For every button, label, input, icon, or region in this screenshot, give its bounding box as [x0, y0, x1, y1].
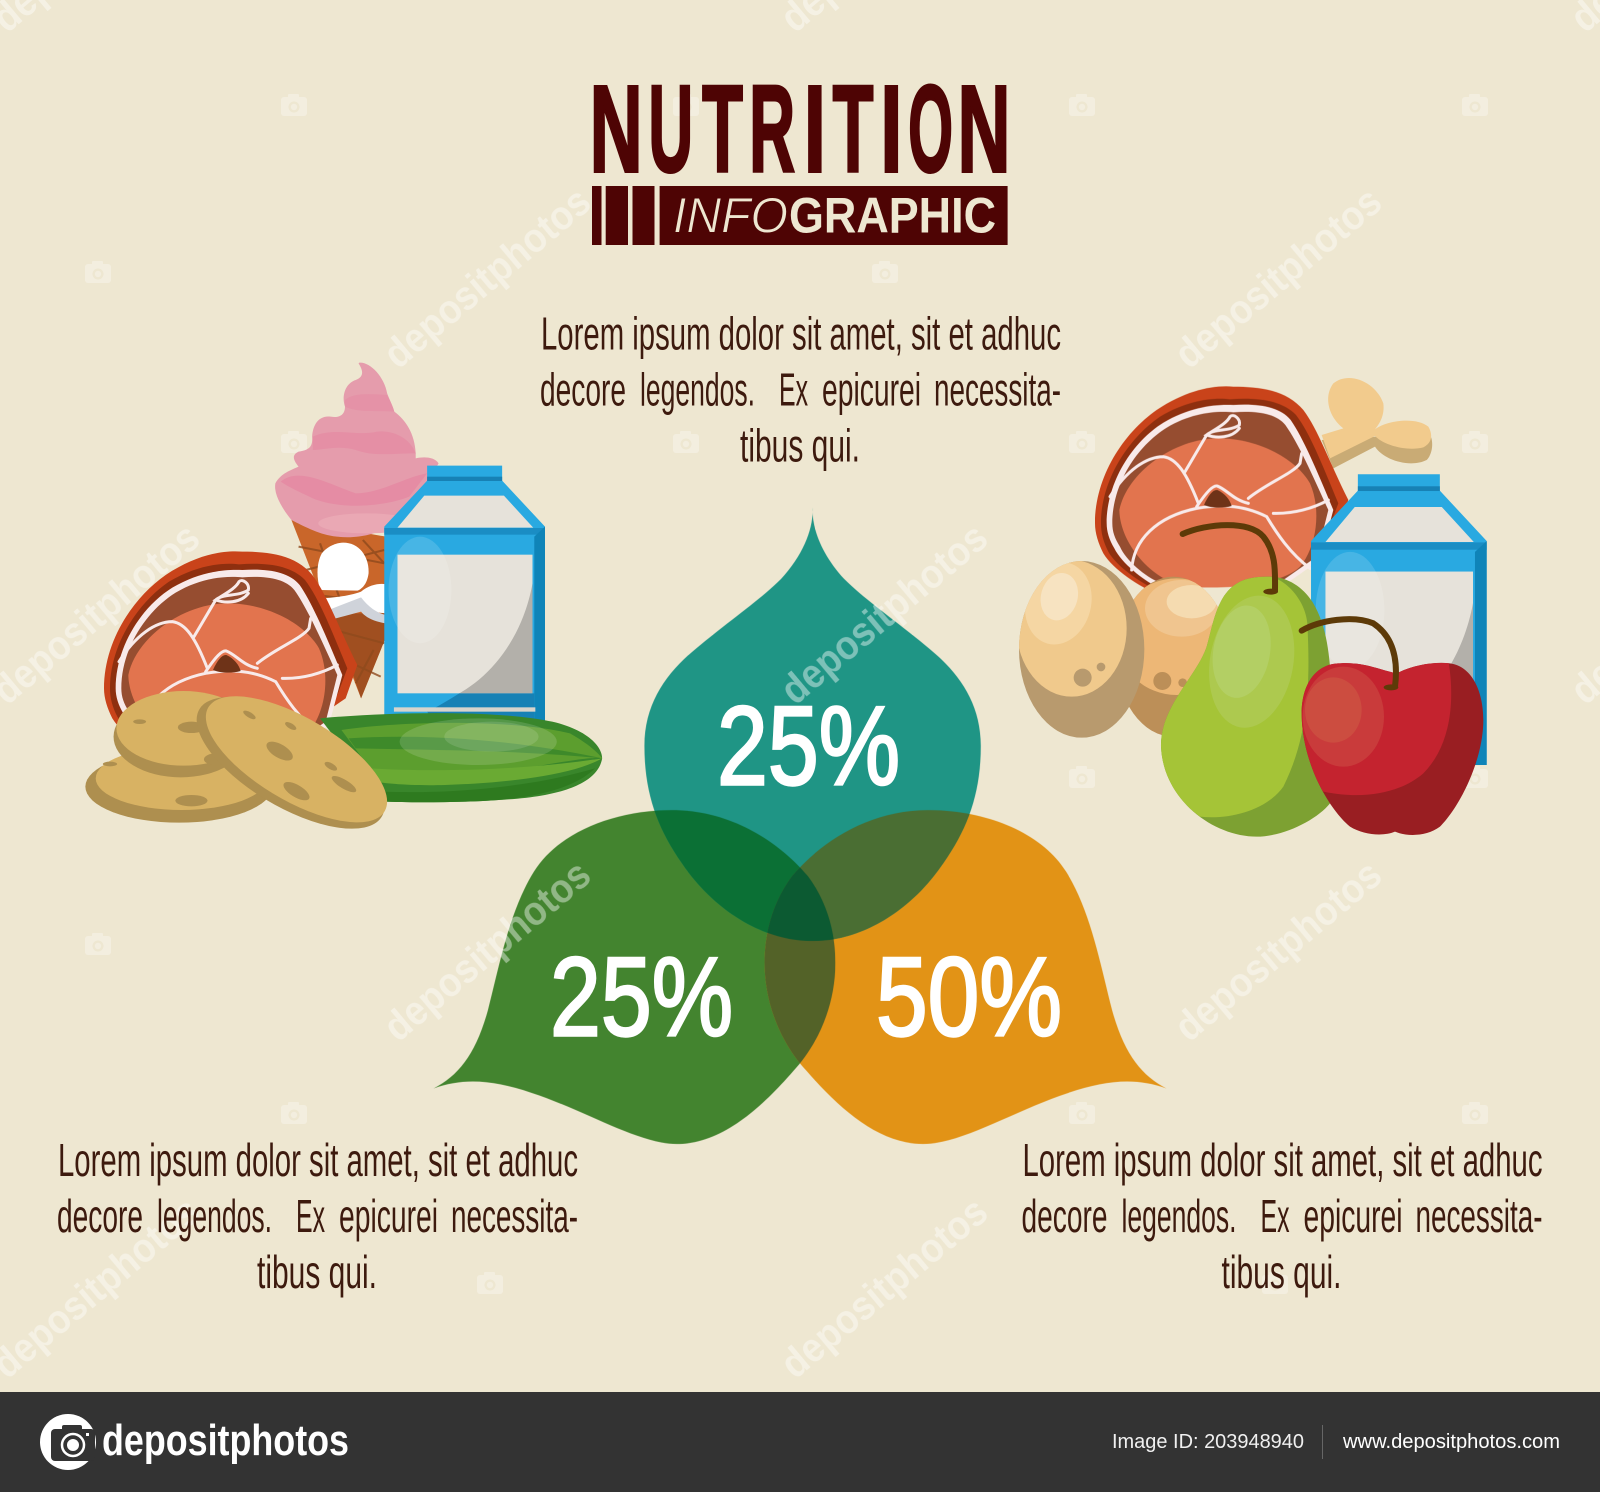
heading: NUTRITION: R [749, 62, 795, 198]
watermark grid: depositphotos [1165, 178, 1390, 377]
watermark on petals: depositphotos [374, 851, 599, 1050]
heading: NUTRITION: O [908, 62, 953, 198]
icon: apple [1300, 619, 1483, 835]
text block: bottom left [57, 1134, 578, 1298]
text block: bottom left: Lorem ipsum dolor sit amet, sit et adhuc [58, 1134, 578, 1186]
overlap: teal and orange [800, 810, 970, 940]
text block: top: epicurei [822, 364, 921, 416]
icon: milk carton [1311, 474, 1487, 765]
value: green 25%: 25% [550, 934, 733, 1060]
value: orange 50%: 50% [876, 934, 1062, 1060]
text block: bottom left: epicurei [339, 1190, 438, 1242]
banner bars [592, 186, 1008, 245]
watermark grid: depositphotos [771, 1188, 996, 1387]
watermark on petals: depositphotos [771, 514, 996, 713]
text block: bottom left: necessita- [451, 1190, 578, 1242]
text block: top: Ex [779, 364, 808, 416]
text block: top: necessita- [934, 364, 1061, 416]
heading: NUTRITION: N [958, 62, 1010, 198]
icon: potatoes [1016, 555, 1237, 738]
title [590, 62, 1010, 245]
text block: bottom right [1022, 1134, 1542, 1298]
subheading: INFOGRAPHIC [673, 188, 996, 244]
subheading: INFOGRAPHIC: GRAPHIC [789, 188, 996, 244]
icon: cucumber [320, 713, 602, 802]
overlap: centre of all three [768, 868, 834, 941]
petal: green [434, 810, 835, 1144]
text block: bottom right: legendos. [1122, 1190, 1236, 1242]
icon: pear [1161, 525, 1332, 837]
value: teal 25%: 25% [717, 684, 900, 808]
icon: ice cream cone [275, 363, 439, 698]
logo wordmark: depositphotos [102, 1416, 349, 1465]
watermark grid: depositphotos [1165, 851, 1390, 1050]
icon: ham [104, 551, 357, 759]
text block: top [540, 308, 1061, 472]
heading: NUTRITION: I [804, 62, 826, 198]
text block: bottom right: decore [1022, 1190, 1108, 1242]
heading: NUTRITION: T [702, 62, 743, 198]
heading: NUTRITION [590, 62, 1010, 198]
icon: depositphotos camera logo [40, 1414, 96, 1470]
icon: milk carton [384, 466, 545, 732]
heading: NUTRITION: N [590, 62, 643, 198]
heading: NUTRITION: U [648, 62, 693, 198]
heading: NUTRITION: I [880, 62, 902, 198]
icon: cookies [85, 669, 408, 854]
chart: three overlapping petals [374, 507, 1166, 1144]
website url: www.depositphotos.com [1342, 1431, 1560, 1453]
text block: bottom left: tibus qui. [257, 1246, 377, 1298]
text block: bottom left: decore [57, 1190, 143, 1242]
overlap: green and orange [764, 910, 836, 1064]
petal: teal [644, 507, 981, 941]
text block: bottom right: Ex [1260, 1190, 1290, 1242]
watermark grid: depositphotos [374, 178, 599, 377]
text block: top: decore [540, 364, 626, 416]
icon: bone [1322, 378, 1432, 468]
text block: bottom right: tibus qui. [1222, 1246, 1342, 1298]
illustration: right food group [1016, 378, 1487, 837]
text block: top: legendos. [640, 364, 755, 416]
watermark on petals [374, 514, 996, 1050]
text block: top: Lorem ipsum dolor sit amet, sit et adhuc [541, 308, 1061, 360]
text block: top: tibus qui. [740, 420, 860, 472]
heading: NUTRITION: T [833, 62, 873, 198]
icon: ham [1095, 386, 1348, 594]
subheading: INFOGRAPHIC: INFO [673, 188, 788, 244]
text block: bottom right: epicurei [1304, 1190, 1402, 1242]
illustration: left food group [85, 363, 602, 854]
petal: orange [765, 810, 1166, 1144]
image id: Image ID: 203948940 [1112, 1431, 1304, 1453]
text block: bottom left: Ex [296, 1190, 325, 1242]
overlap: teal and green [654, 810, 800, 933]
text block: bottom left: legendos. [157, 1190, 272, 1242]
footer bar [0, 1392, 1600, 1492]
